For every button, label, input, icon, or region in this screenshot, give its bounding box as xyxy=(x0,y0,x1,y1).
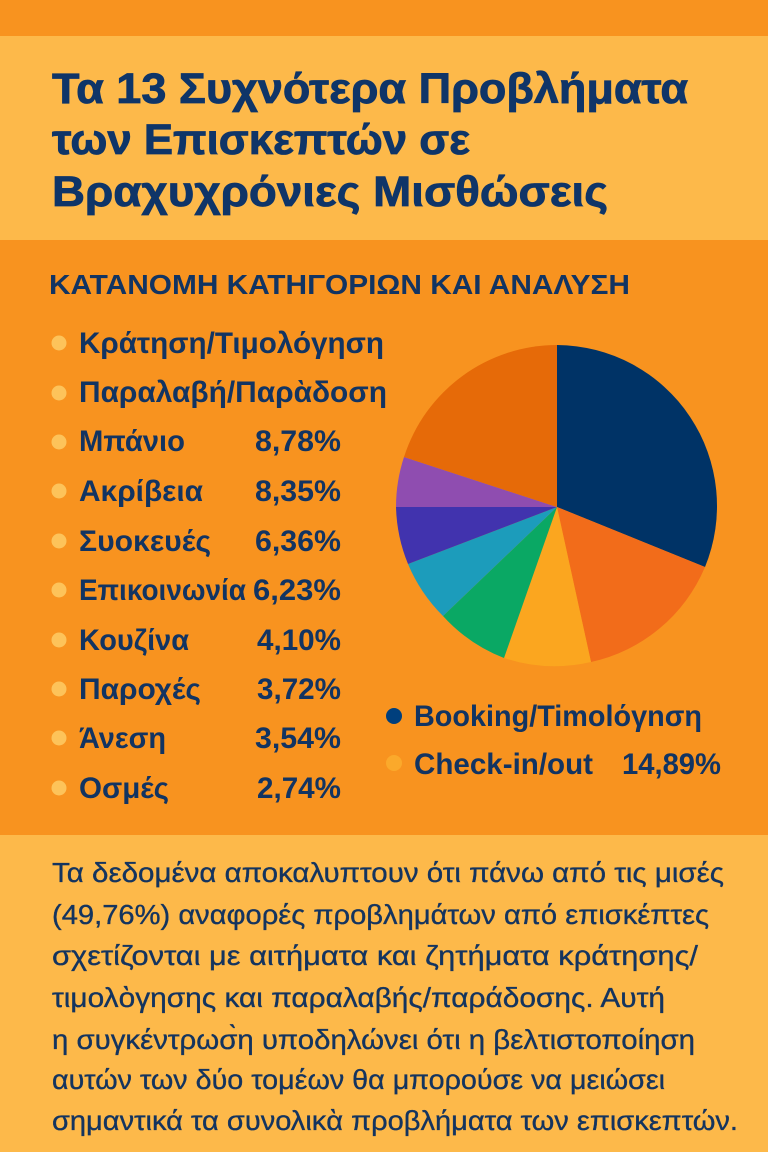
list item: Οσμές: 2,74% xyxy=(257,772,341,805)
panel: category list xyxy=(52,327,387,805)
analysis paragraph: τιμολὸγησης και παραλαβής/παράδοσης. Αυτή xyxy=(52,982,665,1013)
list item: Κουζίνα: 4,10% xyxy=(257,624,341,657)
heading: category distribution: ΚΑΤΑΝΟΜΗ ΚΑΤΗΓΟΡΙΩΝ ΚΑΙ ΑΝΑΛΥΣΗ xyxy=(49,269,630,300)
list item: Ακρίβεια xyxy=(52,475,341,508)
list item: Παροχές xyxy=(52,673,341,706)
pie legend xyxy=(386,700,721,781)
legend item: Check-in/out: Check-in/out xyxy=(414,748,593,781)
analysis paragraph: αυτών των δύο τομέων θα μπορούσε να μειώσει xyxy=(52,1064,665,1095)
list item: Μπάνιο: Μπάνιο xyxy=(79,425,185,458)
title: Βραχυχρόνιες Μισθώσεις xyxy=(52,168,608,216)
title: των Επισκεπτών σε xyxy=(52,116,470,164)
list item: Οσμές xyxy=(52,772,341,805)
panel: title band xyxy=(0,36,768,240)
analysis paragraph: (49,76%) αναφορές προβλημάτων από επισκέπτες xyxy=(52,899,709,930)
list item: Συοκευές xyxy=(52,525,341,558)
list item: Παραλαβή/Παράδοση: Παραλαβή/Παρὰδοση xyxy=(79,376,387,409)
analysis paragraph: σημαντικά τα συνολικὰ προβλήματα των επισκεπτών. xyxy=(52,1105,738,1136)
list item: Κουζίνα xyxy=(52,624,341,657)
panel: analysis text xyxy=(0,835,768,1152)
list item: Παροχές: 3,72% xyxy=(257,673,341,706)
analysis paragraph: Τα δεδομένα αποκαλυπτουν ότι πάνω από τις μισές xyxy=(52,857,724,888)
pie chart xyxy=(396,345,717,666)
title: Τα 13 Συχνότερα Προβλήματα xyxy=(52,65,688,113)
list item: Οσμές: Οσμές xyxy=(79,772,169,805)
list item: Άνεση xyxy=(52,722,341,755)
list item: Άνεση: Άνεση xyxy=(79,722,166,755)
list item: Συοκευές: 6,36% xyxy=(255,525,341,558)
list item: Άνεση: 3,54% xyxy=(255,722,341,755)
list item: Ακρίβεια: 8,35% xyxy=(255,475,341,508)
list item: Κράτηση/Τιμολόγηση: Κράτηση/Τιμολόγηση xyxy=(79,327,384,360)
list item: Επικοινωνία: Επικοινωνία xyxy=(79,574,247,607)
analysis paragraph: σχετίζονται με αιτήματα και ζητήματα κράτησης/ xyxy=(52,940,698,971)
list item: Επικοινωνία xyxy=(52,574,341,607)
list item: Επικοινωνία: 6,23% xyxy=(253,574,341,607)
list item: Συοκευές: Συοκευές xyxy=(79,525,211,558)
list item: Ακρίβεια: Ακρίβεια xyxy=(79,475,204,508)
list item: Μπάνιο xyxy=(52,425,341,458)
title xyxy=(52,65,688,216)
list item: Μπάνιο: 8,78% xyxy=(255,425,341,458)
legend item: Check-in/out: 14,89% xyxy=(622,748,721,781)
list item: Παροχές: Παροχές xyxy=(79,673,201,706)
analysis paragraph: η συγκέντρωσ̀η υποδηλώνει ότι η βελτιστοποίηση xyxy=(52,1024,695,1055)
analysis paragraph xyxy=(52,857,738,1136)
legend item: Check-in/out xyxy=(386,748,721,781)
list item: Κουζίνα: Κουζίνα xyxy=(79,624,190,657)
legend item: Booking: Booking/Timolόγnση xyxy=(414,700,702,733)
